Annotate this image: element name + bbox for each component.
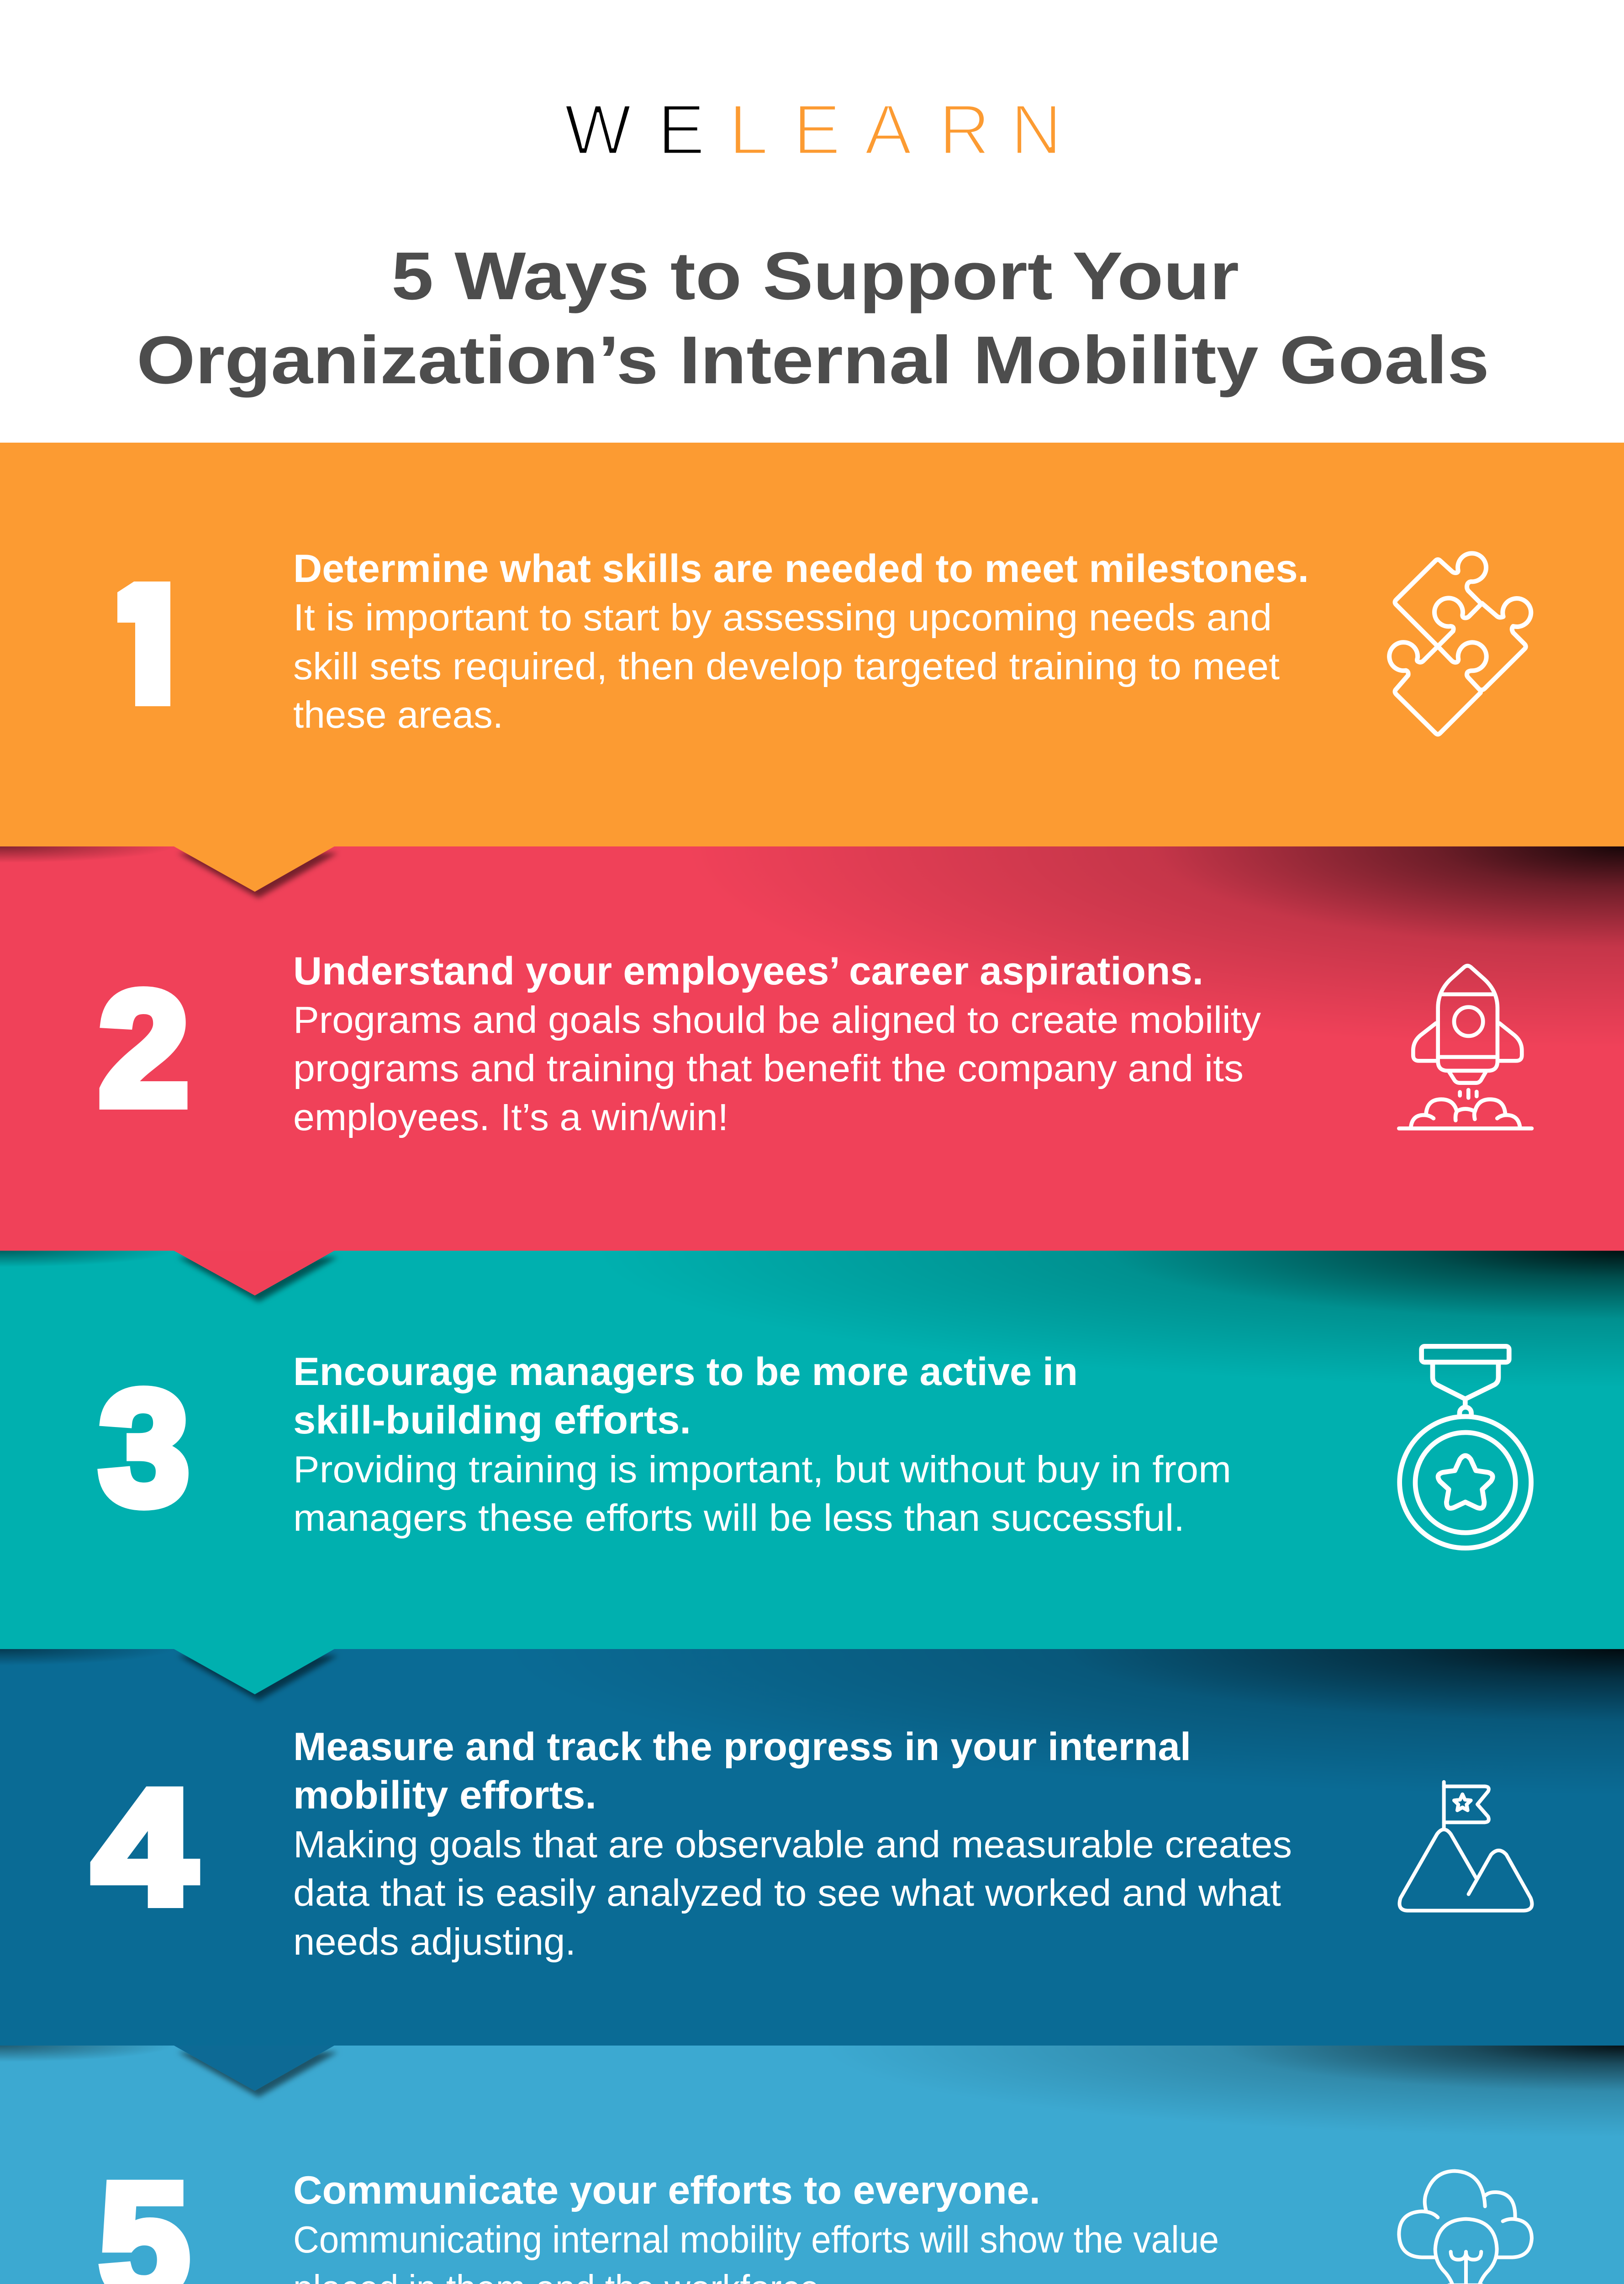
step 2 text [293,949,1261,1138]
logo: WELEARN: LEARN [729,90,1062,169]
step 3 text: Encourage managers to be more active in [293,1350,1078,1394]
title [137,238,1489,398]
title: 5 Ways to Support Your [391,238,1239,314]
number 1: 1 [112,560,203,741]
arrow: blue notch [174,2046,334,2091]
arrow: red notch [174,1251,334,1295]
step 5 text: Communicate your efforts to everyone. [293,2168,1040,2212]
step 5 text: Communicating internal mobility efforts will show the value [293,2218,1219,2261]
number 4: 4 [93,1757,197,1938]
step 4 text: Making goals that are observable and measurable creates [293,1823,1292,1866]
panel: step 3 [0,1251,1624,1649]
icon: medal [1400,1346,1531,1548]
panel: step 1 [0,443,1624,846]
panel: step 4 [0,1649,1624,2046]
step 1 text: It is important to start by assessing upcoming needs and [293,596,1272,639]
icon: cloud and light bulb [1399,2171,1532,2284]
step 2 text: Programs and goals should be aligned to create mobility [293,999,1261,1041]
step 3 text: managers these efforts will be less than successful. [293,1496,1185,1539]
step 4 text: data that is easily analyzed to see what worked and what [293,1872,1281,1914]
icon: rocket [1399,966,1532,1128]
step 4 text: Measure and track the progress in your internal [293,1725,1191,1769]
icon: mountain with flag [1399,1782,1532,1911]
page background [0,0,1624,443]
panel: step 2 [0,846,1624,1251]
step 5 text [293,2168,1219,2284]
step 1 text: Determine what skills are needed to meet milestones. [293,547,1309,591]
logo: WELEARN: WE [564,90,705,169]
step 1 text: skill sets required, then develop targeted training to meet [293,645,1280,687]
title: Organization’s Internal Mobility Goals [137,323,1489,398]
step 2 text: Understand your employees’ career aspirations. [293,949,1203,993]
arrow: teal notch [174,1649,334,1694]
step 1 text [293,547,1309,736]
number 2: 2 [99,958,189,1139]
number 3: 3 [99,1358,190,1539]
step 4 text: mobility efforts. [293,1773,596,1817]
icon: puzzle pieces [1389,553,1531,734]
step 2 text: employees. It’s a win/win! [293,1096,728,1138]
step 3 text [293,1350,1231,1539]
arrow: orange notch [174,846,334,892]
step 4 text: needs adjusting. [293,1920,576,1963]
step 1 text: these areas. [293,693,503,736]
step 3 text: Providing training is important, but without buy in from [293,1448,1231,1491]
step 3 text: skill-building efforts. [293,1398,691,1442]
panel: step 5 [0,2046,1624,2284]
step 2 text: programs and training that benefit the company and its [293,1047,1244,1089]
logo: WELEARN [564,90,1062,169]
step 4 text [293,1725,1292,1963]
